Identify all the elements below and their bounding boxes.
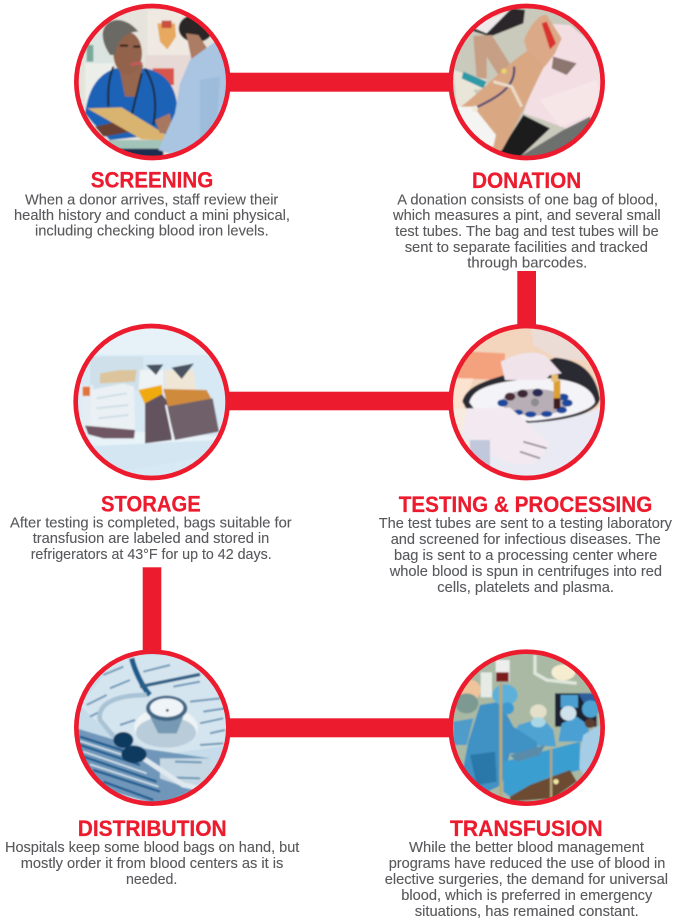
- photo: gloved hands loading centrifuge: [447, 323, 610, 483]
- body text: bag is sent to a processing center where: [394, 547, 657, 564]
- body text: and screened for infectious diseases. The: [391, 531, 661, 548]
- body text: blood, which is preferred in emergency: [401, 887, 653, 904]
- panel: testing and processing: [379, 323, 672, 596]
- body text: [379, 515, 672, 596]
- heading: DONATION: [472, 168, 581, 193]
- photo: blood bags in refrigerator: [73, 323, 233, 483]
- heading: TESTING & PROCESSING: [399, 492, 652, 517]
- panel: storage: [10, 323, 292, 563]
- body text: needed.: [126, 871, 177, 888]
- body text: [14, 191, 290, 240]
- panel: distribution: [5, 650, 300, 888]
- body text: After testing is completed, bags suitable for: [10, 514, 292, 531]
- body text: health history and conduct a mini physical,: [14, 207, 290, 224]
- body text: which measures a pint, and several small: [392, 207, 661, 224]
- connector: storage to distribution: [143, 567, 161, 653]
- connector: donation to testing: [517, 271, 536, 327]
- panel: screening: [14, 3, 290, 240]
- body text: refrigerators at 43°F for up to 42 days.: [31, 546, 272, 563]
- body text: situations, has remained constant.: [415, 903, 639, 920]
- ring: [451, 6, 603, 158]
- heading: SCREENING: [91, 168, 213, 193]
- connector: distribution to transfusion: [225, 718, 455, 737]
- body text: cells, platelets and plasma.: [437, 579, 614, 596]
- body text: test tubes. The bag and test tubes will be: [395, 223, 659, 240]
- body text: While the better blood management: [409, 839, 645, 856]
- panel: transfusion: [385, 650, 668, 920]
- body text: [392, 191, 661, 272]
- photo: arm donating blood: [447, 3, 610, 163]
- body text: through barcodes.: [467, 255, 587, 272]
- body text: [10, 514, 292, 563]
- body text: Hospitals keep some blood bags on hand, but: [5, 839, 300, 856]
- body text: mostly order it from blood centers as it is: [21, 855, 284, 872]
- connector: testing to storage: [225, 392, 455, 410]
- photo: stethoscope on money: [73, 650, 233, 810]
- heading: DISTRIBUTION: [78, 816, 227, 841]
- ring: [76, 652, 228, 804]
- photo: surgical team in operating room: [447, 650, 610, 810]
- body text: When a donor arrives, staff review their: [25, 191, 278, 208]
- ring: [451, 326, 603, 478]
- body text: whole blood is spun in centrifuges into red: [389, 563, 662, 580]
- body text: elective surgeries, the demand for universal: [385, 871, 668, 888]
- body text: transfusion are labeled and stored in: [33, 530, 269, 547]
- photo: doctor talking with donor: [73, 3, 233, 163]
- ring: [451, 652, 603, 804]
- body text: including checking blood iron levels.: [35, 223, 269, 240]
- ring: [76, 6, 228, 158]
- heading: STORAGE: [101, 491, 201, 516]
- body text: sent to separate facilities and tracked: [405, 239, 648, 256]
- ring: [76, 326, 228, 478]
- body text: [5, 839, 300, 888]
- body text: [385, 839, 668, 920]
- body text: A donation consists of one bag of blood,: [397, 191, 658, 208]
- heading: TRANSFUSION: [450, 816, 603, 841]
- panel: donation: [392, 3, 661, 272]
- body text: programs have reduced the use of blood in: [389, 855, 665, 872]
- connector: screening to donation: [225, 73, 455, 92]
